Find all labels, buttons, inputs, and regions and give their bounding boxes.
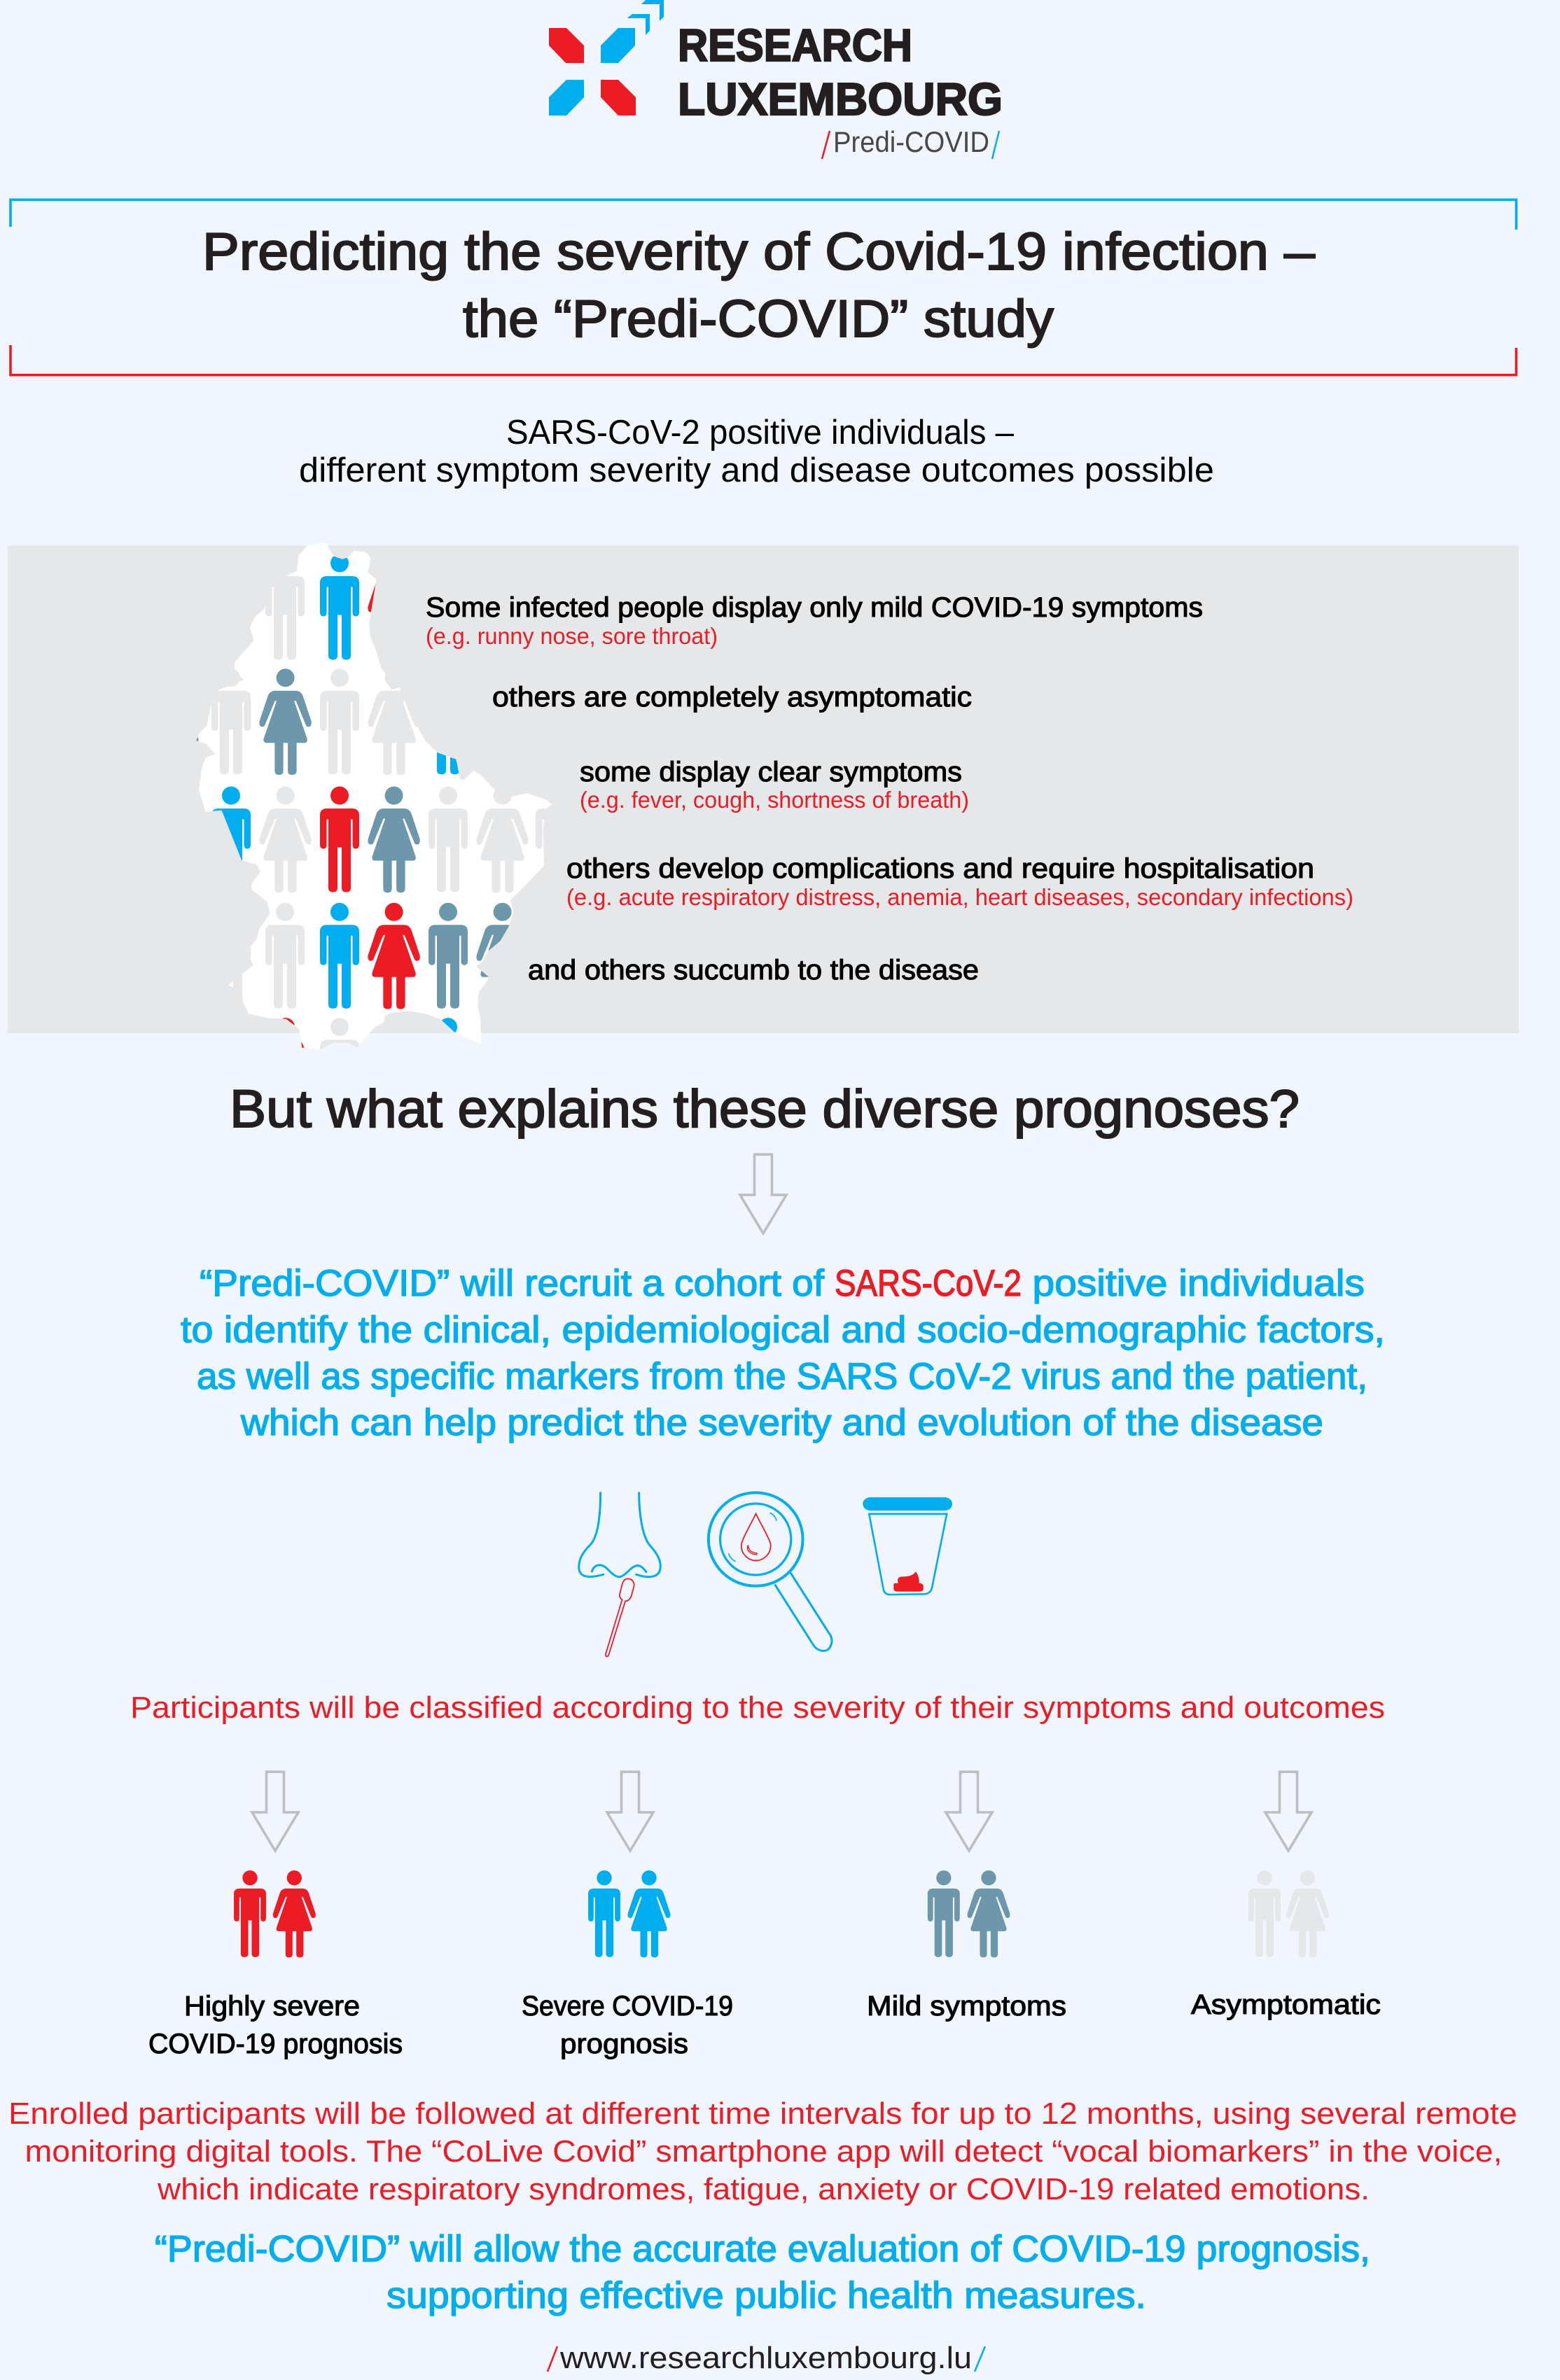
study description: to identify the clinical, epidemiological and socio-demographic factors, [181,1309,1385,1351]
label: prognosis [560,2029,688,2059]
icon: magnifier with blood drop [709,1492,832,1651]
row 4 figures [228,903,512,1009]
follow-up paragraph: which indicate respiratory syndromes, fatigue, anxiety or COVID-19 related emotions. [157,2172,1370,2206]
conclusion: supporting effective public health measures. [386,2275,1146,2316]
row 3 figures [211,787,575,892]
label: Mild symptoms [867,1991,1066,2022]
follow-up paragraph: Enrolled participants will be followed at different time intervals for up to 12 months, using several remote [8,2096,1517,2131]
title frame top [11,200,1517,230]
text: mild symptoms [426,592,1203,649]
icon: sample cup [863,1497,952,1595]
category: highly severe [148,1772,403,2059]
category: asymptomatic [1191,1772,1381,2020]
study description [181,1263,1385,1443]
study description: positive individuals [1032,1263,1365,1304]
text: clear symptoms: (e.g. fever, cough, shortness of breath) [580,787,969,813]
conclusion: “Predi-COVID” will allow the accurate evaluation of COVID-19 prognosis, [155,2229,1370,2270]
text: complications: (e.g. acute respiratory distress, anemia, heart diseases, secondary infections) [566,884,1353,910]
logo wordmark: LUXEMBOURG [678,74,1003,125]
people grid [196,556,552,1049]
row 1 figures [265,556,376,659]
text: clear symptoms: some display clear symptoms [580,757,962,788]
label: COVID-19 prognosis [148,2029,403,2059]
title text [202,222,1315,348]
subtitle [299,414,1214,489]
heading: diverse prognoses: But what explains these diverse prognoses? [230,1079,1300,1139]
row 2 figures [196,668,459,775]
icon: slate couple [928,1870,1010,1957]
label: Severe COVID-19 [522,1991,733,2022]
study description: which can help predict the severity and evolution of the disease [240,1402,1323,1443]
logo mark [549,0,664,115]
title frame bottom [11,345,1517,375]
logo wordmark: RESEARCH [678,20,912,71]
logo sub-label: Predi-COVID [833,125,989,158]
arrow [252,1772,298,1851]
follow-up paragraph: monitoring digital tools. The “CoLive Covid” smartphone app will detect “vocal biomarkers” in the voice, [25,2134,1503,2169]
arrow: down to study description [740,1154,786,1233]
study description: SARS-CoV-2 [835,1263,1022,1304]
title block [11,200,1517,375]
subtitle: different symptom severity and disease outcomes possible [299,451,1214,489]
icon: grey couple [1248,1870,1329,1957]
row 5 figures [281,1018,457,1049]
category: mild [867,1772,1066,2022]
conclusion [155,2229,1370,2316]
panel: outcomes [8,542,1519,1049]
map of Luxembourg with people [196,542,552,1049]
icon: red couple [234,1870,316,1957]
text: complications [566,853,1353,910]
study description: “Predi-COVID” will recruit a cohort of [200,1263,824,1304]
follow-up paragraph [8,2096,1517,2206]
study description: as well as specific markers from the SARS CoV-2 virus and the patient, [197,1356,1367,1397]
logo wordmark [678,20,1003,125]
subtitle: SARS-CoV-2 positive individuals – [506,414,1015,451]
panel background [8,546,1519,1033]
icon: nose and swab [579,1493,660,1657]
arrow [1265,1772,1311,1851]
logo: Research Luxembourg [549,0,1003,159]
title text: the “Predi-COVID” study [463,289,1054,348]
website: www.researchluxembourg.lu [559,2341,972,2375]
arrow [946,1772,992,1851]
text: mild symptoms: (e.g. runny nose, sore throat) [426,623,718,649]
category: severe [522,1772,733,2059]
text: succumb: and others succumb to the disease [528,955,979,986]
label [522,1991,733,2059]
icons: sample types [579,1492,952,1657]
text: complications: others develop complications and require hospitalisation [566,853,1314,884]
text: asymptomatic: others are completely asymptomatic [492,682,972,713]
label [148,1991,403,2059]
label: Asymptomatic [1191,1989,1381,2020]
title text: Predicting the severity of Covid-19 infection – [202,222,1315,281]
label: Highly severe [184,1991,360,2022]
arrow [607,1772,653,1851]
classification statement: Participants will be classified according to the severity of their symptoms and outcomes [130,1690,1385,1725]
text: mild symptoms: Some infected people display only mild COVID-19 symptoms [426,592,1203,623]
text: clear symptoms [580,757,969,813]
icon: blue couple [588,1870,670,1957]
